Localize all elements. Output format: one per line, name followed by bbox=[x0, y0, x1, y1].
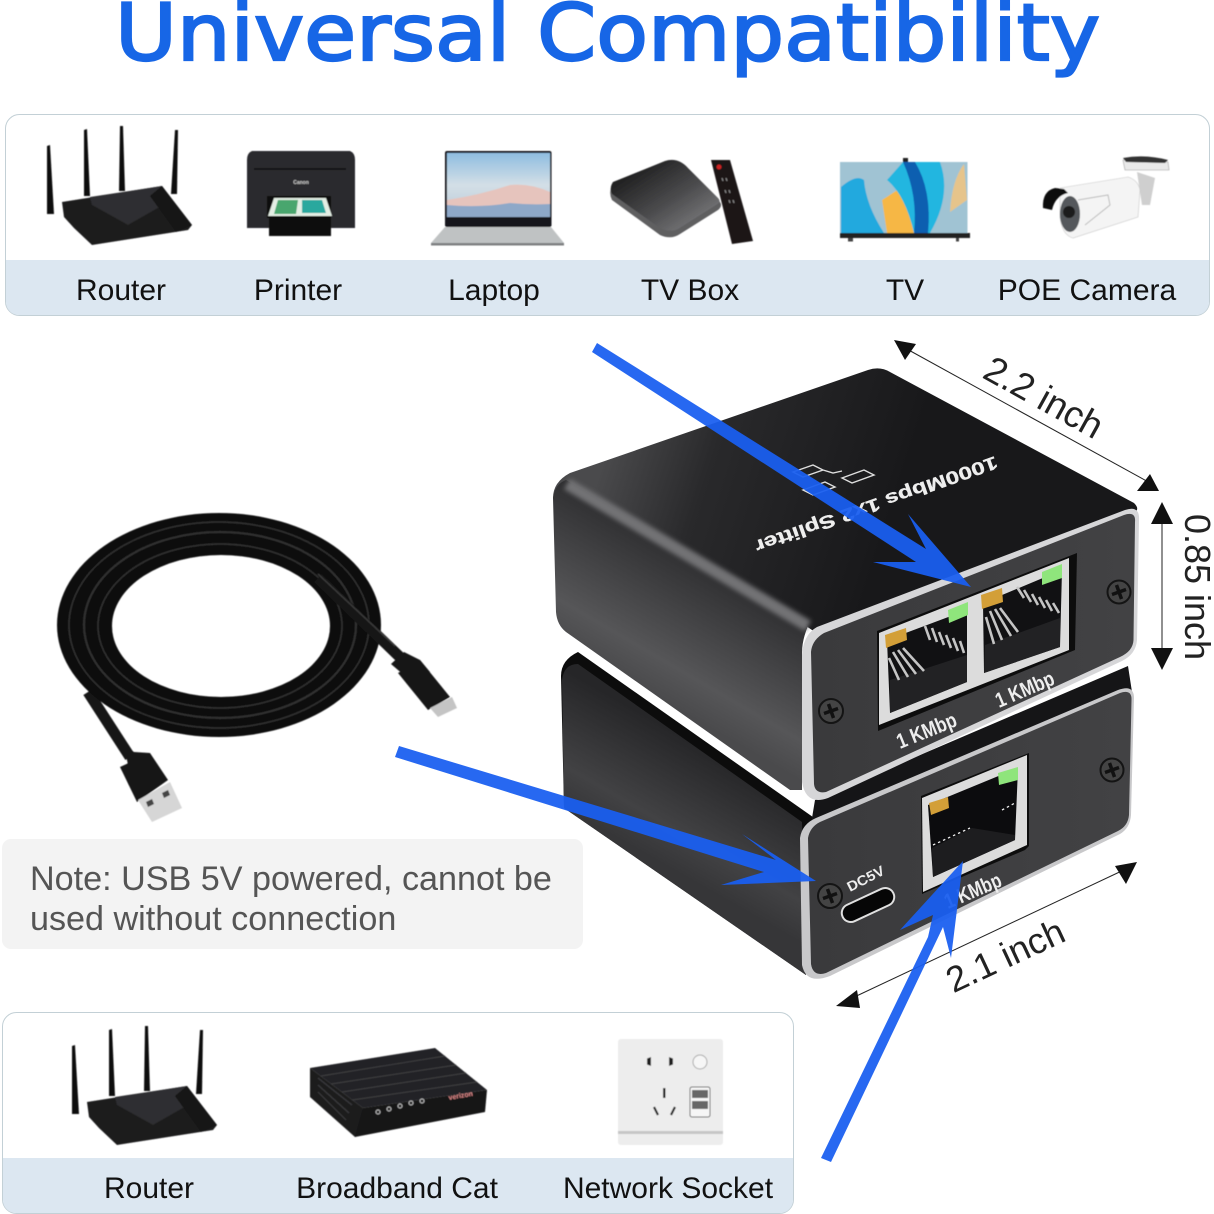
arrow to dual output ports bbox=[592, 343, 971, 587]
icon: laptop bbox=[431, 151, 564, 246]
icon: TV bbox=[840, 158, 970, 242]
icon: broadband modem: verizon bbox=[448, 1091, 473, 1102]
contact stripes bbox=[889, 587, 1059, 680]
screw lower left bbox=[818, 884, 842, 908]
icon: broadband modem bbox=[310, 1048, 487, 1137]
label: input port speed: 1 KMbp bbox=[941, 869, 1005, 914]
dimension: 2.1 inch bbox=[836, 862, 1137, 1008]
top face print: 1000Mbps 1x2 Splitter bbox=[752, 452, 1000, 557]
arrow to USB-C power port bbox=[395, 746, 816, 885]
icon: printer bbox=[247, 151, 355, 236]
USB cable bbox=[57, 513, 457, 822]
screw upper left bbox=[819, 699, 843, 723]
USB-C port bbox=[839, 885, 897, 925]
dimension: 0.85 inch bbox=[1151, 502, 1214, 670]
dimension: 2.2 inch bbox=[894, 340, 1159, 491]
label: Broadband Cat: Broadband Cat bbox=[296, 1172, 499, 1205]
icon: router bbox=[72, 1026, 217, 1145]
network icon on top face bbox=[793, 465, 874, 495]
label: Router: Router bbox=[104, 1172, 194, 1205]
icon: printer: Canon bbox=[293, 180, 309, 186]
label: TV Box: TV Box bbox=[641, 274, 739, 307]
label: right port speed: 1 KMbp bbox=[992, 667, 1058, 713]
screw upper right bbox=[1108, 580, 1130, 604]
label: Router: Router bbox=[76, 274, 166, 307]
label: TV: TV bbox=[886, 274, 924, 307]
panel: compatible devices bbox=[6, 114, 1210, 316]
arrow to input ethernet port bbox=[821, 861, 963, 1162]
ethernet input port bbox=[921, 753, 1029, 894]
icon: POE camera bbox=[1043, 156, 1169, 238]
label: Laptop: Laptop bbox=[448, 274, 540, 307]
lower unit bbox=[561, 652, 1134, 979]
label: POE Camera: POE Camera bbox=[998, 274, 1177, 307]
dimension: 2.2 inch: 2.2 inch bbox=[977, 348, 1110, 447]
panel: input sources bbox=[2, 1012, 794, 1214]
upper dual ethernet ports bbox=[877, 553, 1077, 731]
upper unit bbox=[553, 368, 1139, 800]
icon: router bbox=[47, 126, 192, 245]
label: Network Socket: Network Socket bbox=[563, 1172, 774, 1205]
label: Printer: Printer bbox=[254, 274, 342, 307]
label: DC5V: DC5V bbox=[844, 862, 888, 895]
dimension: 2.1 inch: 2.1 inch bbox=[939, 910, 1071, 1001]
note callout: Note: USB 5V powered, cannot be bbox=[30, 860, 552, 898]
icon: wall socket bbox=[618, 1039, 723, 1145]
note callout bbox=[2, 839, 583, 949]
label: left port speed: 1 KMbp bbox=[893, 709, 960, 754]
icon: TV box with remote bbox=[610, 160, 753, 244]
splitter device bbox=[553, 368, 1139, 979]
note callout: used without connection bbox=[30, 900, 396, 938]
screw lower right bbox=[1100, 758, 1124, 782]
